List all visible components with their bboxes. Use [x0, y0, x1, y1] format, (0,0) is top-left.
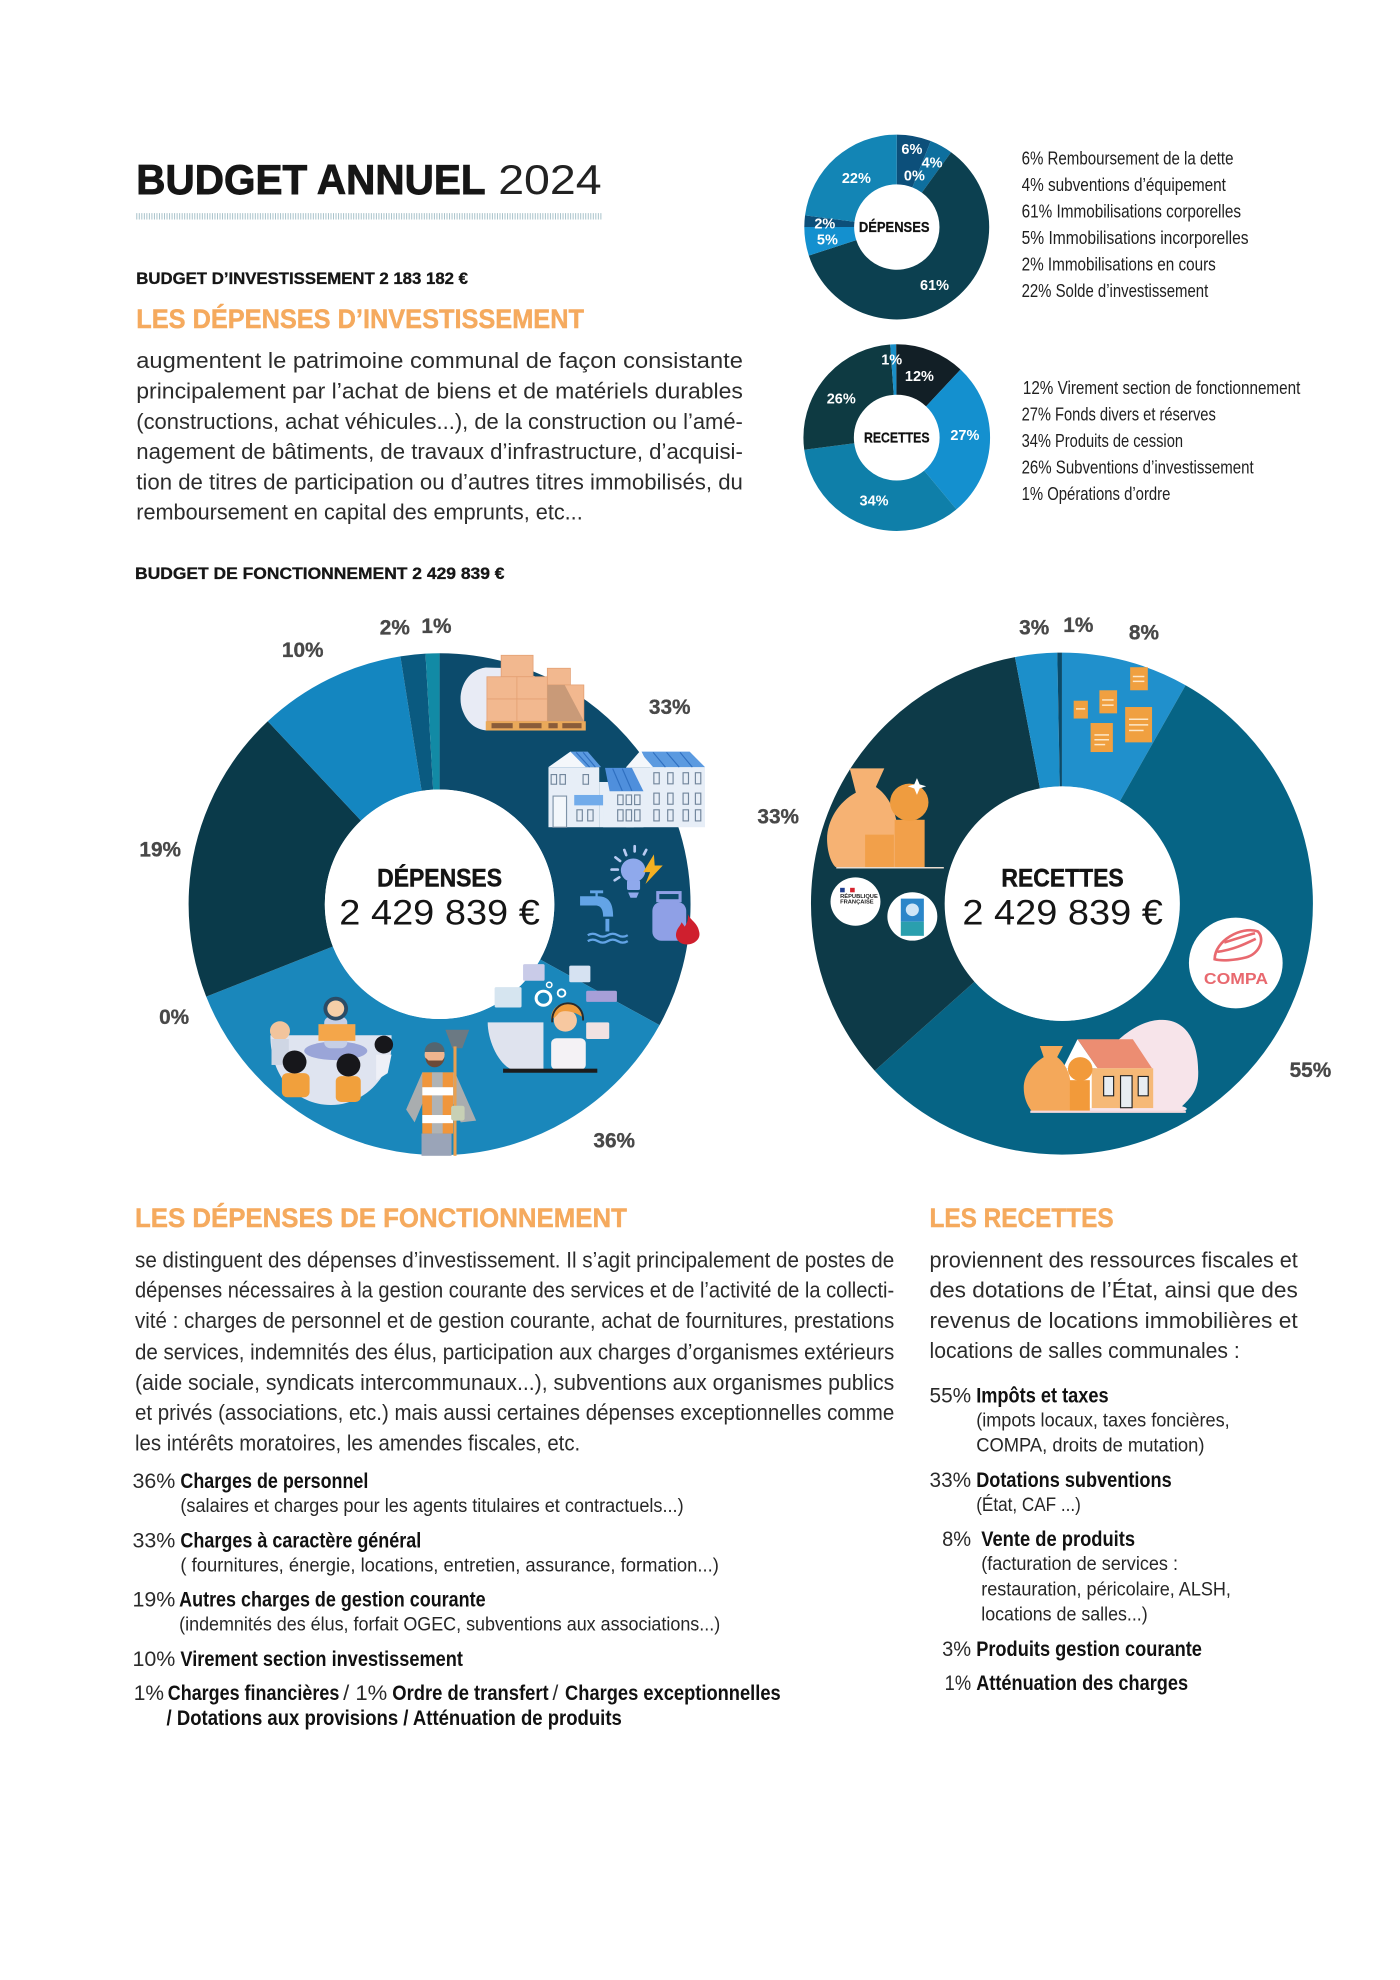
percent labels: dépenses: 19%: [139, 838, 181, 861]
legend: recettes d'investissement: 34% Produits de cession: [1022, 431, 1183, 452]
list: operating expenses breakdown: Charges exceptionnelles: [565, 1682, 781, 1705]
text block: investment explanation: principalement par l’achat de biens et de matériels durables: [136, 379, 743, 404]
text block: operating expenses explanation: vité : charges de personnel et de gestion courante, achat de fournitures, prestations: [135, 1308, 894, 1333]
text block: operating expenses explanation: et privés (associations, etc.) mais aussi certaines dépenses exceptionnelles comme: [135, 1400, 894, 1425]
small donut: dépenses d'investissement: 0%: [904, 168, 925, 184]
text block: investment explanation: augmentent le patrimoine communal de façon consistante: [136, 348, 743, 373]
heading: les dépenses de fonctionnement: LES DÉPENSES DE FONCTIONNEMENT: [135, 1203, 627, 1233]
small donut: recettes d'investissement: 26%: [827, 392, 856, 408]
icons: orange documents: [1074, 667, 1152, 752]
list: recettes breakdown: Produits gestion courante: [976, 1638, 1202, 1661]
list: recettes breakdown: [930, 1384, 1231, 1695]
logo: République française: [831, 877, 880, 926]
list: recettes breakdown: (facturation de services :: [981, 1553, 1178, 1575]
percent labels: recettes: 8%: [1129, 621, 1159, 644]
list: recettes breakdown: Vente de produits: [981, 1528, 1135, 1551]
list: operating expenses breakdown: Charges de personnel: [180, 1470, 368, 1493]
percent labels: recettes: [757, 614, 1331, 1082]
small donut: recettes d'investissement: [827, 352, 979, 510]
text block: operating expenses explanation: (aide sociale, syndicats intercommunaux...), subventions aux organismes publics: [135, 1370, 894, 1395]
small donut: dépenses d'investissement: 4%: [922, 156, 943, 172]
logo: République française: FRANÇAISE: [840, 900, 874, 905]
text block: recettes explanation: locations de salles communales :: [930, 1338, 1240, 1363]
percent labels: recettes: 55%: [1290, 1059, 1331, 1082]
logo: COMPA: [1189, 918, 1283, 1008]
list: recettes breakdown: 8%: [942, 1528, 971, 1551]
list: recettes breakdown: (impots locaux, taxes foncières,: [976, 1409, 1230, 1431]
percent labels: dépenses: 2%: [380, 616, 410, 639]
centre: dépenses total: DÉPENSES: [377, 864, 502, 893]
list: operating expenses breakdown: Ordre de transfert: [392, 1682, 549, 1705]
list: operating expenses breakdown: Charges financières: [168, 1682, 339, 1705]
illustration: house and money: [1024, 1020, 1198, 1112]
text block: recettes explanation: proviennent des ressources fiscales et: [930, 1247, 1298, 1272]
percent labels: dépenses: 0%: [159, 1006, 189, 1029]
legend: recettes d'investissement: 27% Fonds divers et réserves: [1022, 405, 1216, 426]
list: recettes breakdown: 33%: [930, 1469, 971, 1492]
list: recettes breakdown: locations de salles...): [981, 1604, 1148, 1626]
centre: recettes total: RECETTES: [1001, 865, 1124, 893]
small donut: dépenses d'investissement: 61%: [920, 278, 949, 294]
title: 2024: [498, 156, 602, 203]
list: operating expenses breakdown: / 1%: [343, 1682, 387, 1705]
heading: les dépenses d'investissement: LES DÉPENSES D’INVESTISSEMENT: [136, 304, 584, 334]
legend: recettes d'investissement: 12% Virement section de fonctionnement: [1023, 378, 1301, 399]
text block: investment explanation: (constructions, achat véhicules...), de la construction ou l’amé-: [136, 409, 743, 434]
list: recettes breakdown: 3%: [942, 1638, 971, 1661]
list: operating expenses breakdown: Virement section investissement: [180, 1648, 463, 1671]
list: recettes breakdown: COMPA, droits de mutation): [976, 1435, 1204, 1457]
list: operating expenses breakdown: ( fournitures, énergie, locations, entretien, assurance, formation...): [180, 1554, 719, 1576]
list: operating expenses breakdown: 36%: [132, 1470, 175, 1493]
centre: recettes total: 2 429 839 €: [962, 893, 1163, 932]
list: recettes breakdown: Dotations subventions: [976, 1469, 1172, 1492]
illustration: road worker: [406, 1030, 476, 1156]
text block: operating expenses explanation: dépenses nécessaires à la gestion courante des services et de l’activité de la collecti-: [135, 1278, 894, 1303]
legend: dépenses d'investissement: 4% subventions d’équipement: [1022, 175, 1226, 196]
text block: investment explanation: remboursement en capital des emprunts, etc...: [136, 500, 583, 525]
legend: dépenses d'investissement: 2% Immobilisations en cours: [1022, 255, 1216, 276]
legend: dépenses d'investissement: 22% Solde d’investissement: [1022, 281, 1209, 302]
small donut: dépenses d'investissement: DÉPENSES: [859, 219, 930, 236]
logo: COMPA: COMPA: [1204, 971, 1269, 988]
text block: recettes explanation: [930, 1247, 1298, 1363]
text block: operating expenses explanation: [135, 1247, 894, 1455]
list: recettes breakdown: Impôts et taxes: [976, 1384, 1109, 1407]
percent labels: dépenses: 36%: [593, 1130, 635, 1153]
illustration: reading circle: [270, 997, 393, 1105]
illustration: call centre agent: [488, 964, 617, 1073]
text block: recettes explanation: revenus de locations immobilières et: [930, 1308, 1298, 1333]
list: recettes breakdown: (État, CAF ...): [976, 1493, 1081, 1516]
donut chart: recettes de fonctionnement: [878, 719, 1246, 1088]
operating budget heading: BUDGET DE FONCTIONNEMENT 2 429 839 €: [135, 565, 505, 583]
illustration: boxes on pallet: [461, 655, 586, 731]
percent labels: dépenses: 1%: [421, 615, 451, 638]
small donut: dépenses d'investissement: [804, 135, 989, 319]
list: recettes breakdown: restauration, péricolaire, ALSH,: [981, 1578, 1231, 1600]
list: operating expenses breakdown: / Dotations aux provisions / Atténuation de produits: [167, 1707, 622, 1730]
small donut: dépenses d'investissement: 22%: [842, 171, 871, 187]
small donut: recettes d'investissement: 12%: [905, 369, 934, 385]
list: operating expenses breakdown: 1%: [134, 1682, 164, 1705]
legend: dépenses d'investissement: [1022, 149, 1249, 302]
small donut: recettes d'investissement: 34%: [860, 494, 889, 510]
text block: recettes explanation: des dotations de l’État, ainsi que des: [930, 1278, 1298, 1303]
small donut: dépenses d'investissement: 6%: [901, 142, 922, 158]
legend: dépenses d'investissement: 6% Remboursement de la dette: [1022, 149, 1233, 170]
list: operating expenses breakdown: 10%: [132, 1648, 175, 1671]
list: recettes breakdown: 55%: [930, 1384, 971, 1407]
illustration: money bag and coins: [827, 768, 944, 868]
percent labels: dépenses: 10%: [282, 639, 324, 662]
text block: operating expenses explanation: les intérêts moratoires, les amendes fiscales, etc.: [135, 1430, 580, 1455]
title: BUDGET ANNUEL: [136, 156, 486, 203]
legend: dépenses d'investissement: 5% Immobilisations incorporelles: [1022, 228, 1249, 249]
centre: recettes total: [962, 865, 1163, 932]
list: operating expenses breakdown: (indemnités des élus, forfait OGEC, subventions aux associations...): [179, 1614, 720, 1636]
list: operating expenses breakdown: /: [552, 1682, 558, 1705]
small donut: dépenses d'investissement: 5%: [817, 233, 838, 249]
investment budget heading: BUDGET D’INVESTISSEMENT 2 183 182 €: [136, 270, 468, 288]
small donut: recettes d'investissement: RECETTES: [864, 431, 930, 447]
percent labels: recettes: 33%: [757, 806, 799, 829]
list: recettes breakdown: Atténuation des charges: [976, 1672, 1188, 1695]
illustration: town buildings: [548, 752, 705, 827]
text block: investment explanation: [136, 348, 743, 525]
small donut: dépenses d'investissement: 2%: [814, 216, 835, 232]
logo: République française: RÉPUBLIQUE: [840, 892, 878, 900]
logo: CAF: [887, 892, 937, 941]
centre: dépenses total: [339, 864, 540, 932]
small donut: recettes d'investissement: 27%: [950, 428, 979, 444]
list: operating expenses breakdown: (salaires et charges pour les agents titulaires et contractuels...): [180, 1495, 684, 1517]
donut chart: dépenses de fonctionnement: [257, 721, 622, 1087]
percent labels: dépenses: 33%: [649, 696, 691, 719]
percent labels: recettes: 1%: [1063, 614, 1093, 637]
list: operating expenses breakdown: [132, 1470, 781, 1730]
small donut: recettes d'investissement: 1%: [881, 352, 902, 368]
text block: operating expenses explanation: se distinguent des dépenses d’investissement. Il s’agit principalement de postes de: [135, 1247, 894, 1272]
text block: investment explanation: nagement de bâtiments, de travaux d’infrastructure, d’acquisi-: [136, 439, 743, 464]
heading: les recettes: LES RECETTES: [930, 1203, 1114, 1233]
legend: recettes d'investissement: 26% Subventions d’investissement: [1022, 458, 1254, 479]
centre: dépenses total: 2 429 839 €: [339, 893, 540, 932]
list: operating expenses breakdown: Charges à caractère général: [180, 1529, 421, 1552]
text block: investment explanation: tion de titres de participation ou d’autres titres immobilisés, du: [136, 469, 743, 494]
percent labels: dépenses: [139, 615, 691, 1153]
legend: dépenses d'investissement: 61% Immobilisations corporelles: [1022, 202, 1241, 223]
list: operating expenses breakdown: Autres charges de gestion courante: [179, 1589, 486, 1612]
icons: electricity, water, gas: [580, 846, 700, 944]
list: operating expenses breakdown: 33%: [132, 1529, 175, 1552]
legend: recettes d'investissement: 1% Opérations d’ordre: [1022, 484, 1170, 505]
list: recettes breakdown: 1%: [945, 1672, 971, 1695]
legend: recettes d'investissement: [1022, 378, 1301, 505]
percent labels: recettes: 3%: [1019, 616, 1049, 639]
text block: operating expenses explanation: de services, indemnités des élus, participation aux charges d’organismes extérieurs: [135, 1340, 894, 1365]
list: operating expenses breakdown: 19%: [132, 1589, 175, 1612]
